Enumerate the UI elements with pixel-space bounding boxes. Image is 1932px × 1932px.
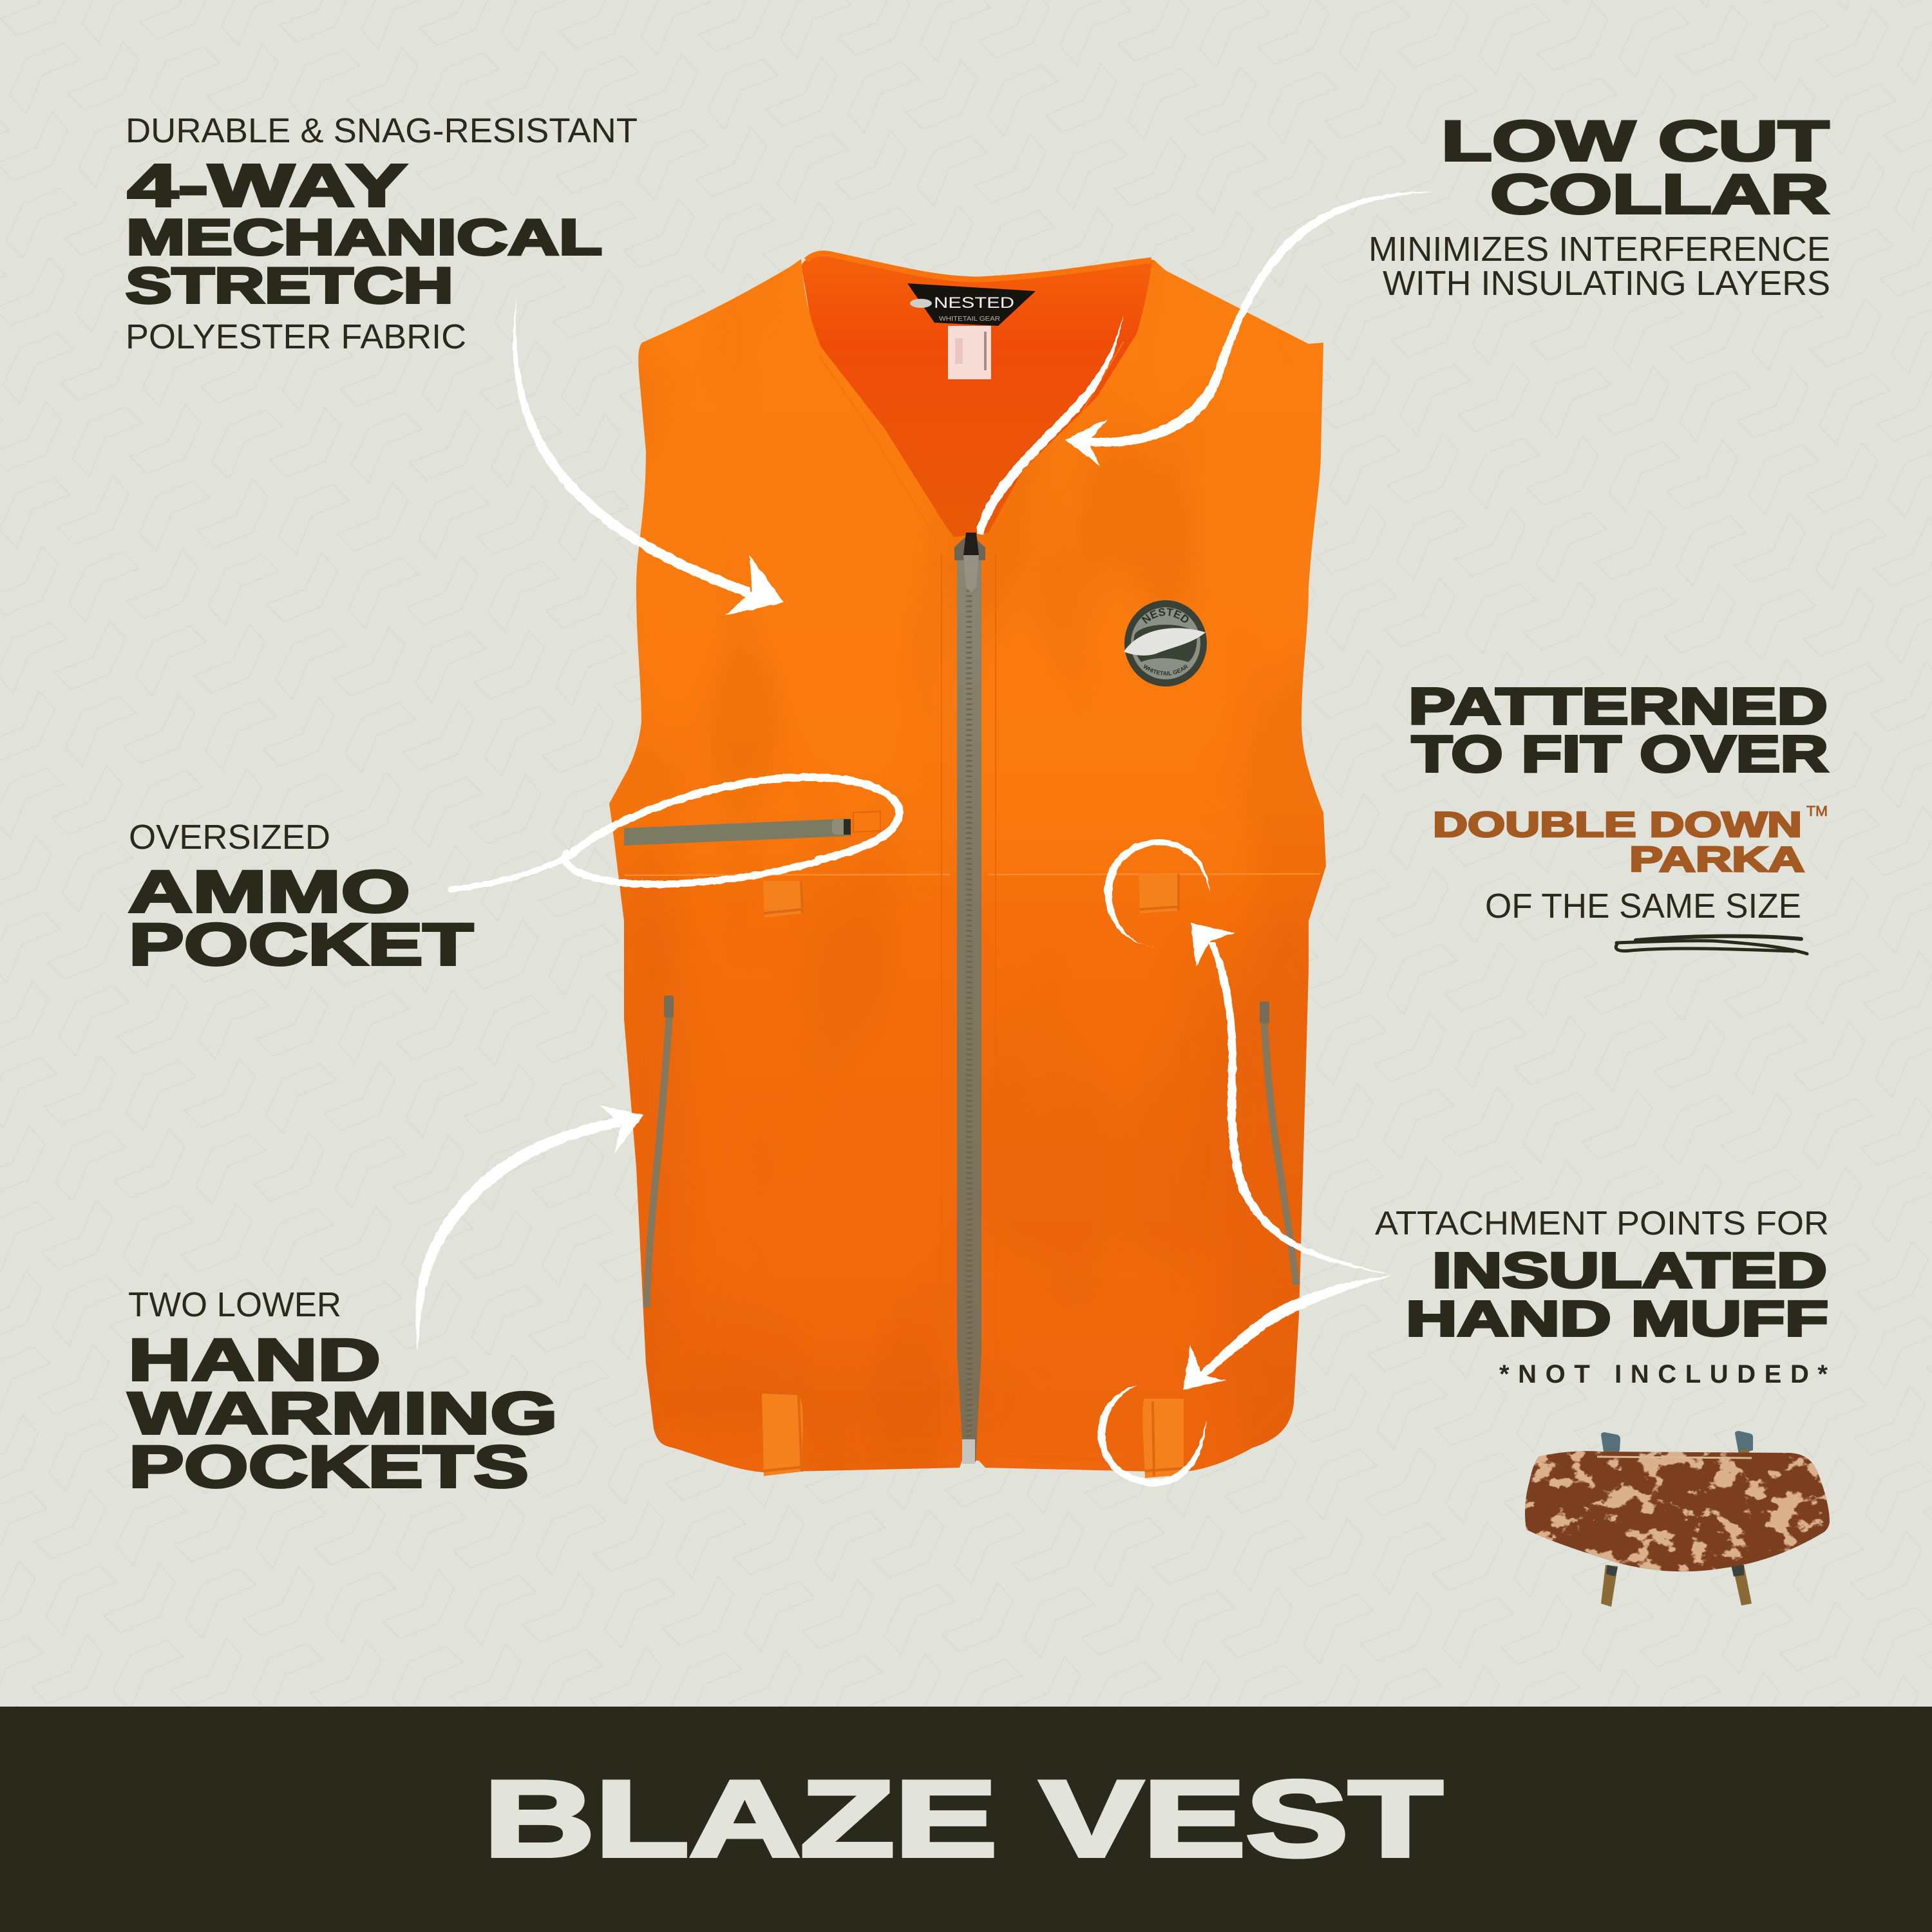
callout: low cut collar: COLLAR [1490,164,1829,225]
callout: fabric: POLYESTER FABRIC [126,317,466,356]
back neck label [907,283,1036,326]
center zipper [957,554,981,1462]
collar rim [806,254,1151,279]
callout: hand muff: INSULATED [1432,1243,1827,1298]
back neck label: WHITETAIL GEAR [939,316,1000,323]
title: BLAZE VEST [484,1758,1443,1879]
ammo pocket ellipse [451,777,899,889]
callout: patterned to fit over: TM [1806,803,1828,819]
callout: low cut collar: LOW CUT [1441,109,1829,173]
callout: ammo pocket: OVERSIZED [129,818,330,857]
zipper slider [954,533,985,560]
callout: low cut collar: MINIMIZES INTERFERENCE [1368,230,1830,269]
callout: ammo pocket: POCKET [129,912,473,978]
seams [624,341,1320,1461]
hand muff image [1520,1431,1835,1607]
logo badge: NESTED [1141,608,1189,624]
callout: patterned to fit over: PATTERNED [1408,677,1828,735]
callout: hand muff: HAND MUFF [1406,1291,1828,1347]
lower loop circle [1098,1385,1206,1486]
callout: patterned to fit over: OF THE SAME SIZE [1485,887,1801,925]
upper loop circle [1104,839,1209,947]
arrow: attachment down [1183,1275,1392,1390]
title banner [0,1707,1932,1932]
callout: hand warming pockets [128,1285,558,1500]
callout: ammo pocket: AMMO [128,859,410,925]
logo badge: WHITETAIL GEAR [1144,664,1189,676]
arrow: attachment up [1191,923,1392,1275]
callout: patterned to fit over: TO FIT OVER [1412,725,1828,782]
vest body [609,259,1326,1472]
callout: hand warming pockets: POCKETS [129,1434,529,1500]
chest pocket zipper [624,811,880,846]
callout: fabric: MECHANICAL [126,209,602,265]
underline scribble [1616,936,1807,954]
callout: patterned to fit over: PARKA [1629,839,1804,879]
muff body [1520,1449,1835,1575]
fabric shading [617,388,1326,1471]
callout: patterned to fit over: DOUBLE DOWN [1433,804,1802,844]
annotation arrows [416,192,1435,1486]
muff clips [1601,1431,1753,1455]
logo badge [1124,600,1207,687]
callout: fabric: STRETCH [126,257,453,314]
callout: hand warming pockets: TWO LOWER [128,1285,341,1324]
vest interior neck [801,253,1157,554]
callout: hand muff [1375,1205,1829,1388]
callout: hand warming pockets: WARMING [128,1381,558,1446]
hand warmer pockets [647,1008,1296,1307]
callout: fabric [126,111,638,356]
callout: hand warming pockets: HAND [128,1327,381,1393]
callout: low cut collar: WITH INSULATING LAYERS [1383,264,1830,303]
callout: patterned to fit over [1408,677,1828,954]
arrow: collar [1065,192,1435,466]
callout: fabric: 4-WAY [128,152,407,219]
back neck label: NESTED [934,294,1014,312]
callout: hand muff: *NOT INCLUDED* [1499,1360,1828,1388]
callout: ammo pocket [128,818,473,978]
arrow: stretch [513,298,784,615]
callout: hand muff: ATTACHMENT POINTS FOR [1375,1205,1829,1242]
muff straps [1601,1565,1752,1607]
care tag [948,326,991,379]
callout: low cut collar [1368,109,1830,303]
webbing loops [762,874,1184,1478]
pocket zipper pulls [664,996,1269,1023]
collar line [976,314,1124,535]
callout: fabric: DURABLE & SNAG-RESISTANT [126,111,638,150]
arrow: hand warming [416,1105,643,1352]
vest [609,251,1326,1478]
